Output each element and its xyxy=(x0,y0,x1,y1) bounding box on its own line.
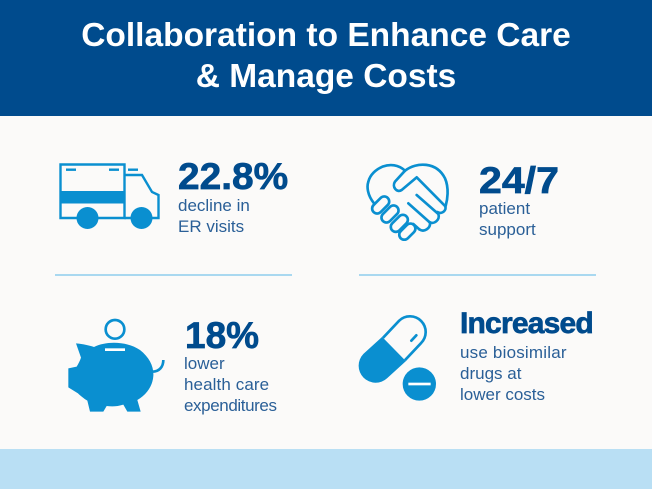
title: & Manage Costs xyxy=(196,58,456,95)
description: expenditures xyxy=(184,396,277,415)
icon: handshake heart xyxy=(366,163,449,241)
description: use biosimilar xyxy=(460,343,567,362)
icon: pill xyxy=(358,315,436,401)
description: patient xyxy=(479,199,530,218)
panel: biosimilar drugs xyxy=(358,307,593,404)
divider xyxy=(55,274,292,276)
description xyxy=(460,343,567,404)
description xyxy=(479,199,536,239)
bottom band xyxy=(0,449,652,489)
description: drugs at xyxy=(460,364,521,383)
description: lower xyxy=(184,354,225,373)
title xyxy=(81,17,571,95)
title banner xyxy=(0,0,652,116)
stat: 22.8% xyxy=(178,156,288,197)
stat: 24/7 xyxy=(479,160,559,201)
panel: ER visits xyxy=(59,156,288,236)
description: lower costs xyxy=(460,385,545,404)
title: Collaboration to Enhance Care xyxy=(81,17,571,54)
description xyxy=(178,196,250,236)
description: decline in xyxy=(178,196,250,215)
description xyxy=(184,354,277,415)
divider xyxy=(359,274,596,276)
description: ER visits xyxy=(178,217,244,236)
panel: health care expenditures xyxy=(68,315,277,415)
description: support xyxy=(479,220,536,239)
icon: truck xyxy=(59,163,160,229)
stat: 18% xyxy=(185,315,259,356)
panel: patient support xyxy=(366,160,559,241)
stat: Increased xyxy=(460,307,593,340)
icon: piggy bank xyxy=(68,318,165,412)
description: health care xyxy=(184,375,269,394)
